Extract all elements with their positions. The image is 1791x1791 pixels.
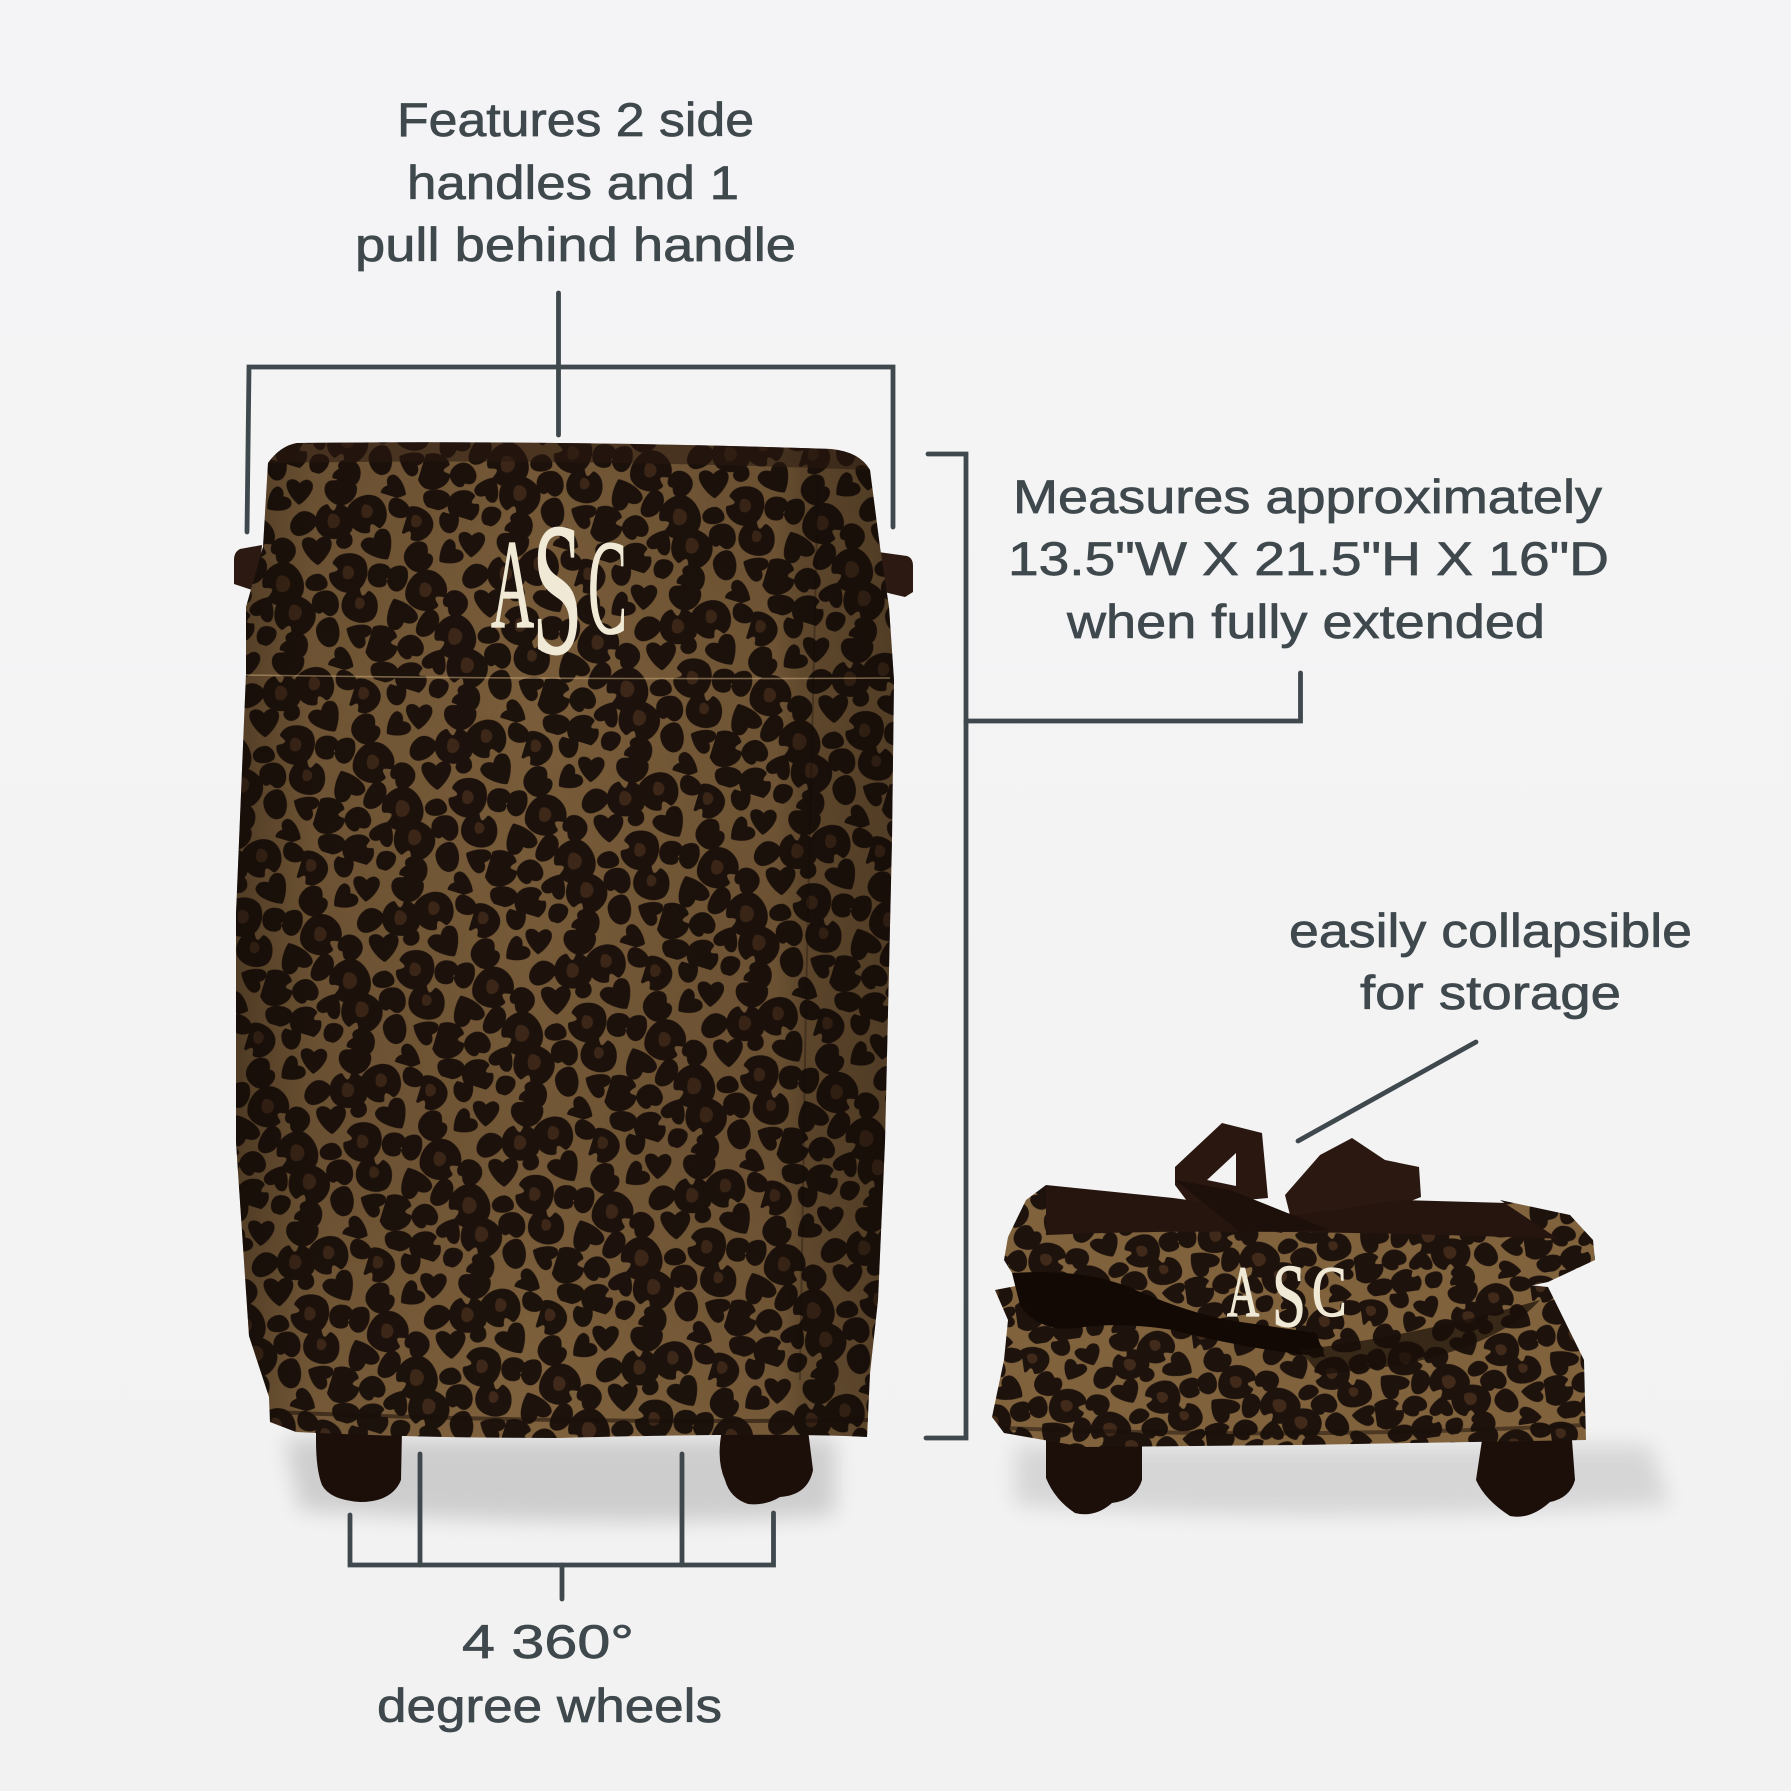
lower folded box bbox=[992, 1250, 1586, 1447]
bracket: wheels callout bbox=[350, 1454, 774, 1599]
label: handles: Features 2 side bbox=[397, 93, 754, 146]
horizontal and side shading bbox=[236, 442, 894, 1438]
upper leopard flap bbox=[1004, 1232, 1595, 1325]
bracket: handles callout bbox=[247, 293, 893, 532]
right side handle bbox=[878, 552, 913, 597]
line: collapsible callout bbox=[1298, 1042, 1476, 1141]
monogram ASC bbox=[491, 485, 627, 695]
collapsed leopard cart bbox=[992, 1123, 1595, 1517]
collapsed monogram ASC: S bbox=[1272, 1245, 1306, 1346]
right folded handle loop bbox=[1285, 1138, 1421, 1225]
collapsed monogram ASC bbox=[1227, 1245, 1347, 1346]
label: dimensions: Measures approximately bbox=[1013, 470, 1603, 523]
left front wheel bbox=[316, 1430, 402, 1502]
shadow under tall bag bbox=[285, 1438, 835, 1521]
collapsed monogram ASC: A bbox=[1227, 1252, 1259, 1332]
tall leopard cart bbox=[234, 442, 913, 1504]
label: wheels: degree wheels bbox=[377, 1679, 722, 1732]
label: handles bbox=[355, 93, 796, 271]
dark inner panel bbox=[1046, 1185, 1590, 1250]
left collapsed wheel bbox=[1046, 1440, 1142, 1514]
upper leopard flap back corner bbox=[1008, 1185, 1060, 1240]
right front wheel bbox=[720, 1430, 813, 1504]
left side handle bbox=[234, 545, 262, 592]
bottom seam collapsed bbox=[1004, 1425, 1584, 1433]
collapsed monogram ASC: C bbox=[1312, 1252, 1347, 1332]
label: wheels bbox=[377, 1615, 722, 1732]
monogram ASC: C bbox=[588, 512, 627, 663]
label: collapsible bbox=[1289, 904, 1692, 1019]
dark fold shadow bbox=[1012, 1272, 1325, 1357]
label: handles: pull behind handle bbox=[355, 218, 796, 271]
right collapsed wheel bbox=[1476, 1440, 1575, 1517]
vertical shading bbox=[236, 442, 894, 1438]
label: handles: handles and 1 bbox=[407, 156, 739, 209]
side panel crease bbox=[800, 480, 818, 1380]
label: dimensions: 13.5"W X 21.5"H X 16"D bbox=[1008, 532, 1609, 585]
lower fold dark shadow bbox=[1300, 1300, 1540, 1375]
label: dimensions bbox=[1008, 470, 1609, 648]
leopard print body bbox=[236, 442, 894, 1438]
bottom seam bbox=[272, 1412, 868, 1421]
monogram ASC: A bbox=[491, 516, 534, 655]
top seam bbox=[246, 675, 890, 679]
left folded handle loop bbox=[1175, 1123, 1268, 1205]
right leopard rim corner bbox=[1500, 1200, 1593, 1250]
label: dimensions: when fully extended bbox=[1066, 595, 1545, 648]
label: collapsible: for storage bbox=[1360, 966, 1621, 1019]
bracket: dimensions callout bbox=[926, 454, 1300, 1438]
center dark strap band bbox=[1175, 1180, 1330, 1232]
label: wheels: 4 360° bbox=[462, 1615, 634, 1668]
monogram ASC: S bbox=[532, 485, 583, 695]
shadow under collapsed bag bbox=[1015, 1445, 1670, 1515]
top rim bbox=[268, 442, 870, 470]
label: collapsible: easily collapsible bbox=[1289, 904, 1692, 957]
